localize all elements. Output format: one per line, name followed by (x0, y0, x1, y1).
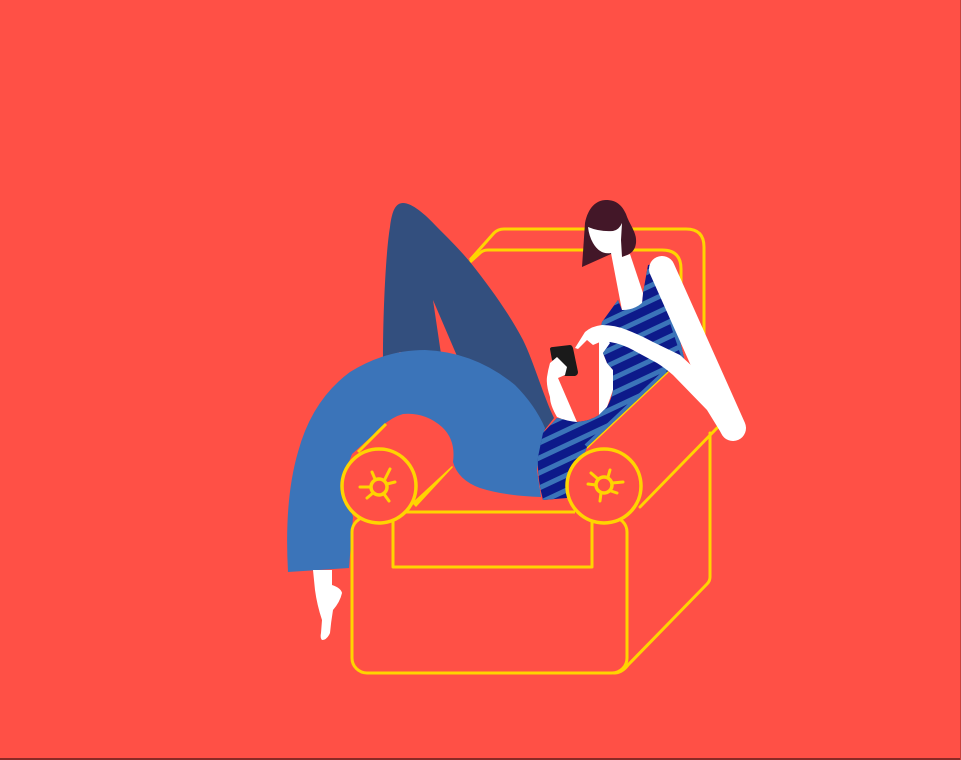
leg: raised dark leg (383, 203, 554, 436)
phone (550, 345, 578, 376)
armchair left arm lower edge (412, 466, 453, 507)
armchair seat cushion (393, 512, 592, 567)
armchair seat front (352, 517, 627, 673)
left armrest roll with sun ornament (342, 449, 416, 523)
hand and forearm holding phone (547, 357, 577, 422)
armchair back (470, 229, 704, 340)
dress with stripes (538, 264, 684, 500)
pointing arm (575, 325, 723, 436)
hair (582, 200, 636, 267)
right arm (662, 269, 733, 428)
right armrest roll with sun ornament (567, 449, 641, 523)
gap between the raised legs (433, 300, 457, 356)
neck and face (588, 223, 643, 310)
torso skin (599, 342, 613, 416)
leg: blue trouser leg (287, 350, 545, 572)
armchair left arm top edge (358, 424, 386, 452)
foot (313, 570, 342, 640)
armchair right arm lines (587, 372, 717, 673)
